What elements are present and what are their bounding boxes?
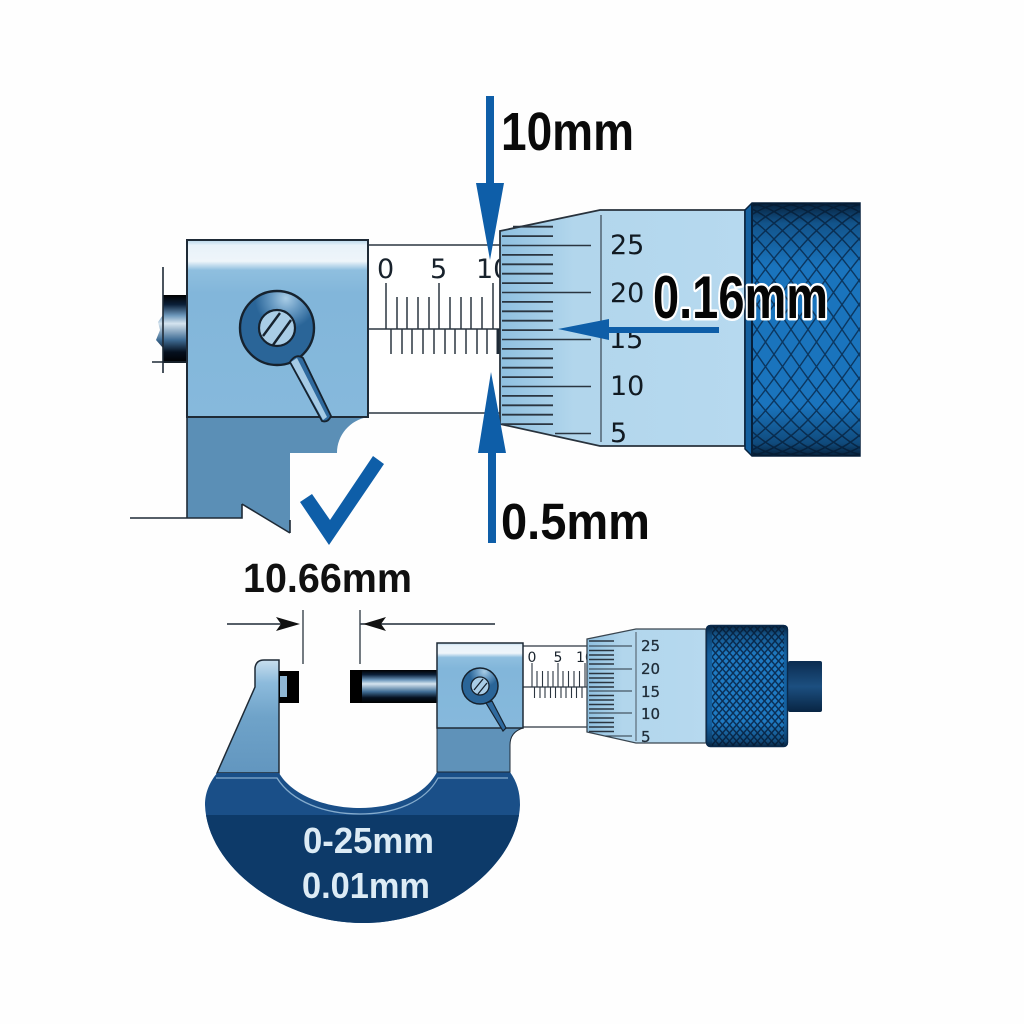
thimble: 20 <box>641 660 660 678</box>
arrow: 0.16mm pointer <box>558 319 719 340</box>
spindle <box>350 670 438 703</box>
frame lower body <box>187 417 368 533</box>
lock ring and lever <box>462 668 506 731</box>
check mark <box>300 456 384 545</box>
sleeve: 10 <box>576 650 594 666</box>
arrow: 10mm pointer <box>476 96 504 260</box>
frame text: resolution: 0.01mm <box>302 865 430 906</box>
sleeve: 5 <box>554 650 562 666</box>
label: 0.16mm: 0.16mm <box>653 264 828 331</box>
sleeve <box>523 646 594 727</box>
sleeve with main scale: 5 <box>430 254 447 285</box>
thimble with vernier scale: 25 <box>610 230 644 261</box>
sleeve: 0 <box>528 650 536 666</box>
label: 10.66mm: 10.66mm <box>243 555 412 601</box>
lower block <box>437 728 523 772</box>
thimble <box>587 629 706 746</box>
arrow: 0.5mm pointer <box>478 372 506 543</box>
thimble with vernier scale <box>500 210 745 449</box>
thimble: 25 <box>641 637 660 655</box>
frame text: range: 0-25mm <box>303 820 434 861</box>
thimble with vernier scale: 5 <box>610 418 627 449</box>
frame block <box>187 240 368 417</box>
label: 0.5mm: 0.5mm <box>501 493 650 550</box>
sleeve with main scale: 0 <box>377 254 394 285</box>
knurled ratchet grip <box>744 202 861 457</box>
full micrometer <box>200 625 822 930</box>
C-frame <box>200 772 530 930</box>
anvil post <box>217 660 279 773</box>
thimble: 10 <box>641 705 660 723</box>
thimble with vernier scale: 15 <box>609 324 643 355</box>
label: 10mm: 10mm <box>501 102 634 162</box>
spindle stub behind frame <box>152 267 187 373</box>
sleeve with main scale <box>368 245 510 413</box>
sleeve with main scale: 10 <box>476 254 510 285</box>
block <box>437 643 523 728</box>
thimble with vernier scale: 20 <box>610 278 644 309</box>
knurled grip <box>706 625 788 747</box>
detail view: sleeve and thimble enlargement <box>130 96 861 545</box>
frame outline <box>130 417 290 533</box>
anvil <box>279 671 299 703</box>
end cap <box>788 661 822 712</box>
lock ring and lever <box>240 291 331 421</box>
thimble: 15 <box>641 683 660 701</box>
dimension arrows <box>227 610 495 664</box>
thimble: 5 <box>641 728 651 746</box>
thimble with vernier scale: 10 <box>610 371 644 402</box>
